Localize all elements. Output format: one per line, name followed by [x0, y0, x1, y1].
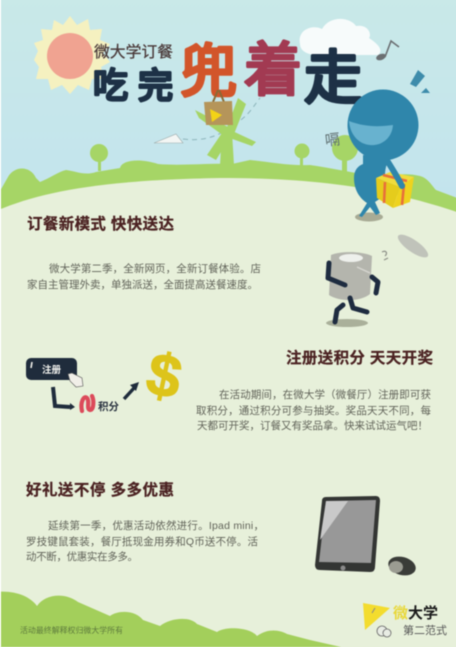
heading: section 1: 订餐新模式 快快送达 — [27, 214, 174, 233]
illustration: blue character with gift — [348, 90, 418, 222]
watermark — [377, 623, 447, 637]
text: section 1 body — [27, 262, 261, 291]
icon: surprise marks — [410, 70, 430, 93]
logo: micro university — [363, 603, 438, 630]
text: section 3 body: 延续第一季，优惠活动依然进行。Ipad mini， — [48, 519, 264, 532]
panel: bottom green hills — [0, 592, 341, 647]
heading: section 3: 好礼送不停 多多优惠 — [26, 480, 174, 499]
icon: sun — [34, 16, 110, 94]
text: section 2 body — [196, 388, 432, 432]
title: 兜 — [180, 40, 237, 104]
text: section 3 body: 动不断，优惠实在多多。 — [26, 550, 138, 563]
watermark: 第二范式 — [403, 623, 447, 637]
title: 完 — [138, 67, 173, 106]
text: section 3 body — [26, 519, 264, 563]
icon: cloud — [300, 19, 380, 55]
text: section 2 body: 天都可开奖，订餐又有奖品拿。快来试试运气吧！ — [197, 419, 428, 432]
text: section 2 body: 取积分，通过积分可参与抽奖。奖品天天不同，每 — [196, 404, 432, 417]
green hills — [0, 160, 456, 215]
arrow: down and right — [53, 387, 75, 410]
heading: subtitle: 微大学订餐 — [94, 43, 173, 61]
title — [93, 38, 362, 111]
icon: red N — [81, 396, 93, 411]
diagram: register to points to prizes — [26, 339, 187, 413]
title: 着 — [244, 38, 302, 103]
heading: section 2: 注册送积分 天天开奖 — [286, 348, 433, 367]
icon: trees — [90, 135, 358, 174]
text: section 2 body: 在活动期间，在微大学（微餐厅）注册即可获 — [219, 388, 431, 401]
text: section 3 body: 罗技键鼠套装，餐厅抵现金用券和Q币送不停。活 — [26, 535, 258, 548]
logo: micro university: 微 — [393, 604, 408, 622]
icon: paper plane with dashed path — [154, 98, 260, 143]
title: 走 — [304, 46, 362, 111]
label: points: 积分 — [98, 400, 119, 413]
illustration: running pot — [326, 231, 431, 327]
button: register — [26, 358, 83, 387]
panel: sky background — [0, 0, 456, 215]
ground dome — [0, 178, 456, 225]
icon: mouse — [386, 554, 418, 578]
panel: ground background — [0, 205, 456, 647]
logo: micro university: 大学 — [408, 604, 438, 622]
left edge strip — [0, 0, 1, 647]
icon: tablet — [315, 496, 380, 572]
title: 吃 — [93, 67, 128, 106]
arrow: up right — [124, 382, 139, 399]
icon: windmill — [195, 98, 256, 165]
button: register: 注册 — [42, 364, 62, 376]
text: section 1 body: 微大学第二季，全新网页，全新订餐体验。店 — [49, 262, 261, 275]
text: footer note: 活动最终解释权归微大学所有 — [20, 625, 123, 635]
icon: music note — [375, 41, 399, 62]
icon: dollar sign: $ — [141, 339, 187, 412]
text: section 1 body: 家自主管理外卖，单独派送，全面提高送餐速度。 — [27, 278, 258, 291]
icon: hiccup text: 嗝 — [324, 131, 341, 150]
icon: carrier bag — [204, 90, 233, 125]
